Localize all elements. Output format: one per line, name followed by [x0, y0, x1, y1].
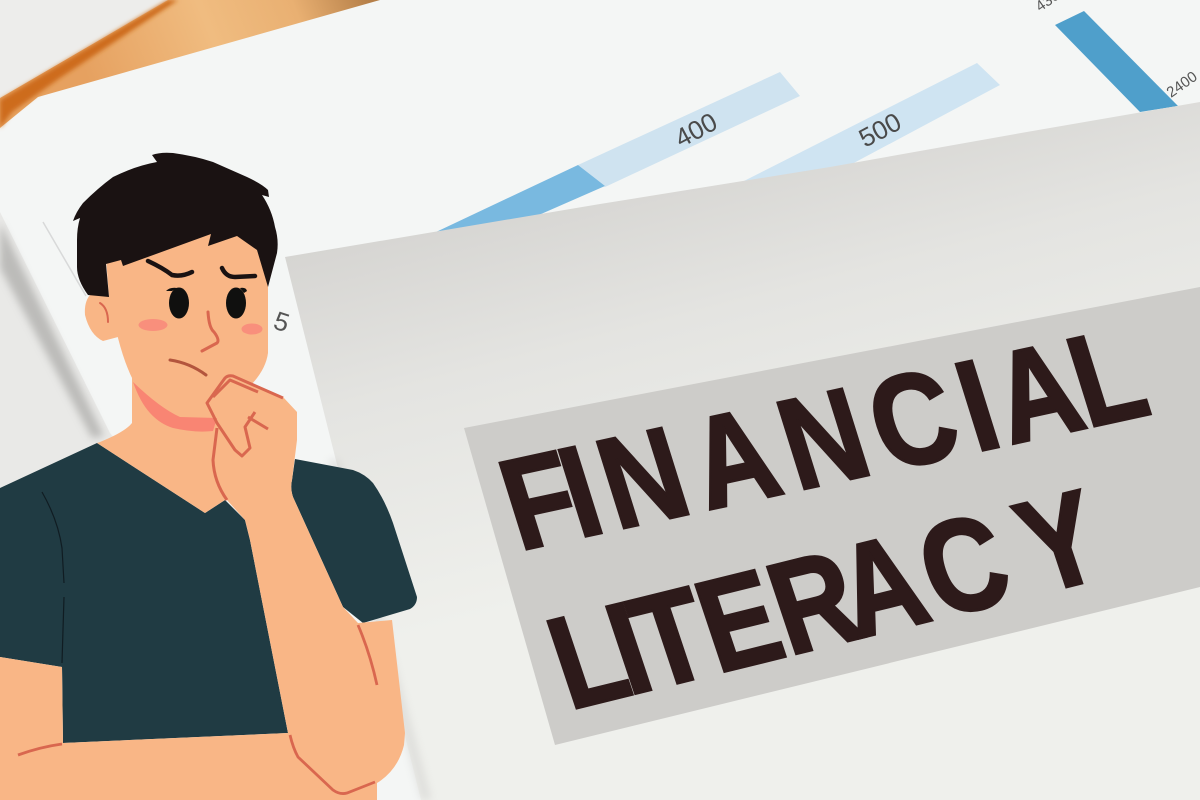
chart bar: dark blue: 2400: [1164, 68, 1200, 101]
chart bar: 500: [742, 63, 1000, 182]
eyes: [166, 288, 247, 318]
lower left sheet with shadow: [0, 212, 120, 495]
eyebrows: [148, 261, 255, 277]
wooden desk strip: [0, 0, 380, 128]
hand lines: [207, 376, 283, 500]
face: [106, 225, 268, 425]
chart bar: dark blue: [1033, 0, 1200, 112]
chart bar: 500: 500: [854, 106, 906, 153]
heading: literacy: LITERACY: [532, 463, 1120, 738]
blush: [138, 319, 262, 334]
hair: [73, 153, 278, 297]
axis number fragment: 5: [270, 305, 293, 338]
neck shadow: [133, 382, 217, 432]
shirt: [0, 443, 417, 743]
arms: [0, 375, 405, 800]
neck: [97, 378, 240, 513]
character: thinking man: [0, 153, 417, 800]
envelope sheet: [285, 102, 1200, 800]
chart bar: 400: 400: [670, 106, 722, 153]
heading: financial: FINANCIAL: [484, 300, 1162, 577]
ear: [85, 295, 118, 341]
chart bar: 400: [436, 72, 800, 232]
nose, mouth and ear lines: [100, 303, 218, 375]
